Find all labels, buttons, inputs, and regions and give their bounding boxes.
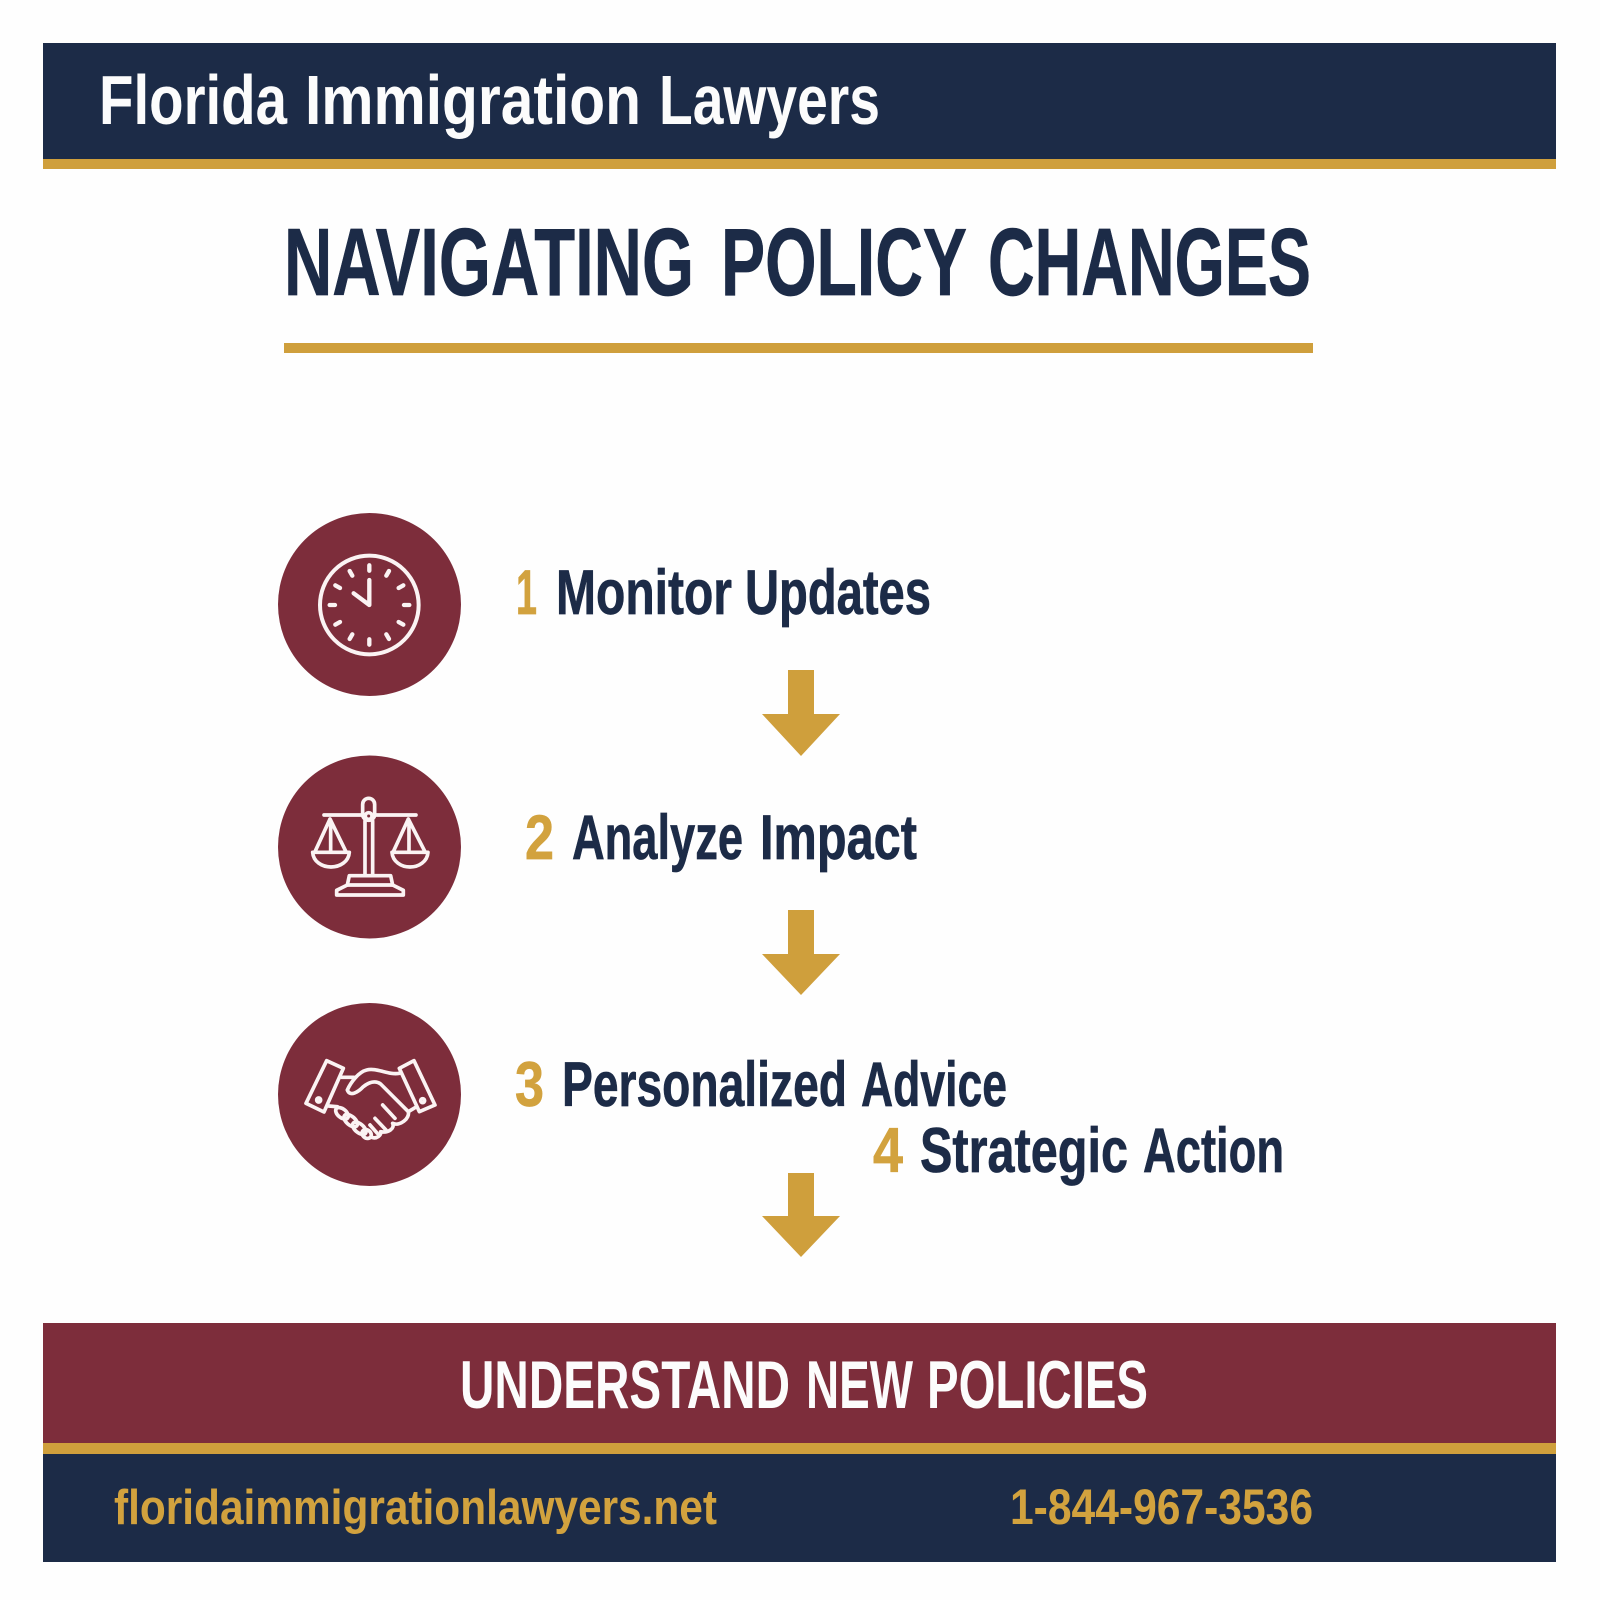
step 2 label — [525, 803, 917, 873]
main title — [284, 209, 1313, 353]
step 1 label — [516, 558, 931, 628]
step 3 label: Personalized — [562, 1050, 847, 1120]
call to action banner: POLICIES — [927, 1347, 1148, 1423]
firm name — [99, 61, 880, 139]
step 4 label: Strategic — [920, 1116, 1128, 1186]
main title: POLICY — [721, 209, 967, 316]
step 1 label: 1 — [516, 558, 537, 628]
main title: CHANGES — [988, 209, 1311, 316]
step 2 label: 2 — [525, 803, 554, 873]
step 3 icon: handshake — [278, 1003, 461, 1186]
call to action banner: NEW — [806, 1347, 914, 1423]
step 2 icon: scales of justice — [278, 756, 461, 938]
header banner — [43, 43, 1556, 169]
main title: NAVIGATING — [284, 209, 694, 316]
firm name: Florida — [99, 61, 288, 139]
footer bar — [43, 1454, 1556, 1562]
step 2 label: Impact — [760, 803, 917, 873]
step 4 label: 4 — [873, 1116, 903, 1186]
step 1 label: Monitor — [556, 558, 732, 628]
step 3 label: Advice — [861, 1050, 1007, 1120]
step 2 label: Analyze — [572, 803, 743, 873]
arrow 3 — [762, 1173, 840, 1257]
website: floridaimmigrationlawyers.net — [114, 1481, 717, 1535]
phone number: 1-844-967-3536 — [1010, 1479, 1313, 1535]
arrow 1 — [762, 670, 840, 756]
step 1 label: Updates — [745, 558, 931, 628]
step 1 icon: clock — [278, 513, 461, 696]
call to action banner — [43, 1323, 1556, 1443]
gold divider — [43, 1443, 1556, 1454]
step 4 label — [873, 1116, 1284, 1186]
step 3 label: 3 — [515, 1050, 544, 1120]
step 4 label: Action — [1143, 1116, 1284, 1186]
firm name: Lawyers — [659, 61, 880, 139]
arrow 2 — [762, 910, 840, 995]
firm name: Immigration — [305, 61, 641, 139]
call to action banner: UNDERSTAND — [460, 1347, 790, 1423]
